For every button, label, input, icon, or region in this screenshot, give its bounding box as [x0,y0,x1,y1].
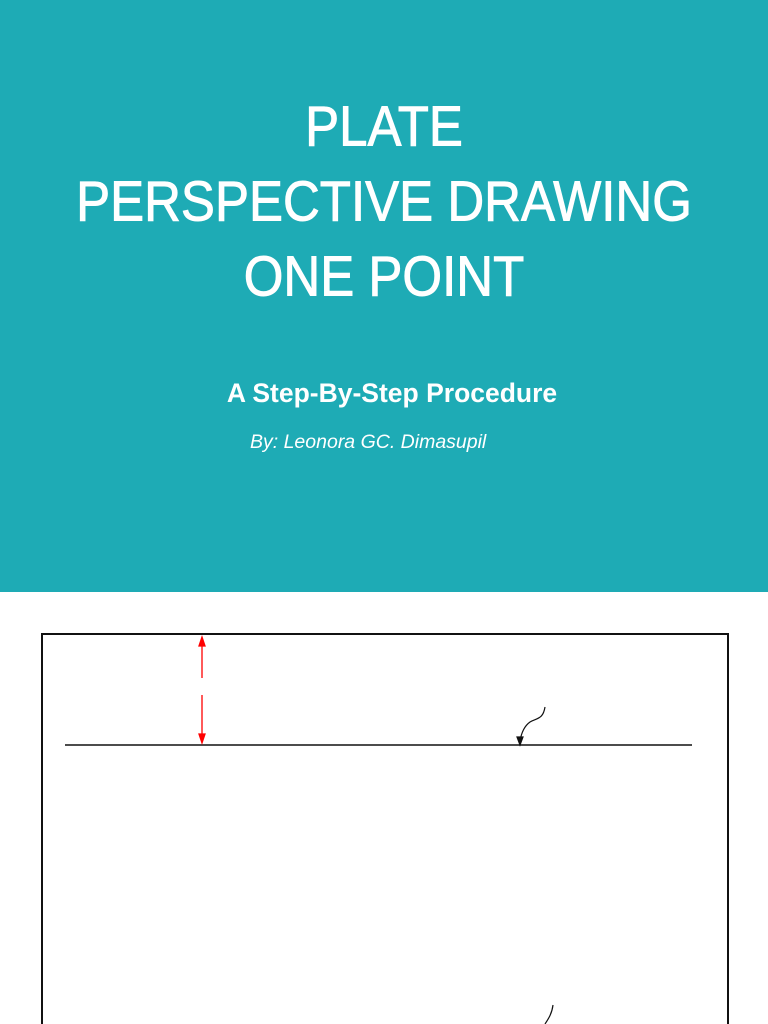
subtitle: A Step-By-Step Procedure [227,378,557,408]
callout arrow: horizon [517,707,545,745]
title: ONE POINT [244,245,524,308]
author byline: By: Leonora GC. Dimasupil [250,431,486,453]
callout arrow: lower [545,1005,553,1024]
plate border [42,634,728,1024]
title: PLATE [305,95,463,158]
red dimension arrow [199,637,205,743]
header band [0,0,768,592]
title: PERSPECTIVE DRAWING [76,170,692,233]
horizon line [65,744,692,746]
title [76,95,692,308]
